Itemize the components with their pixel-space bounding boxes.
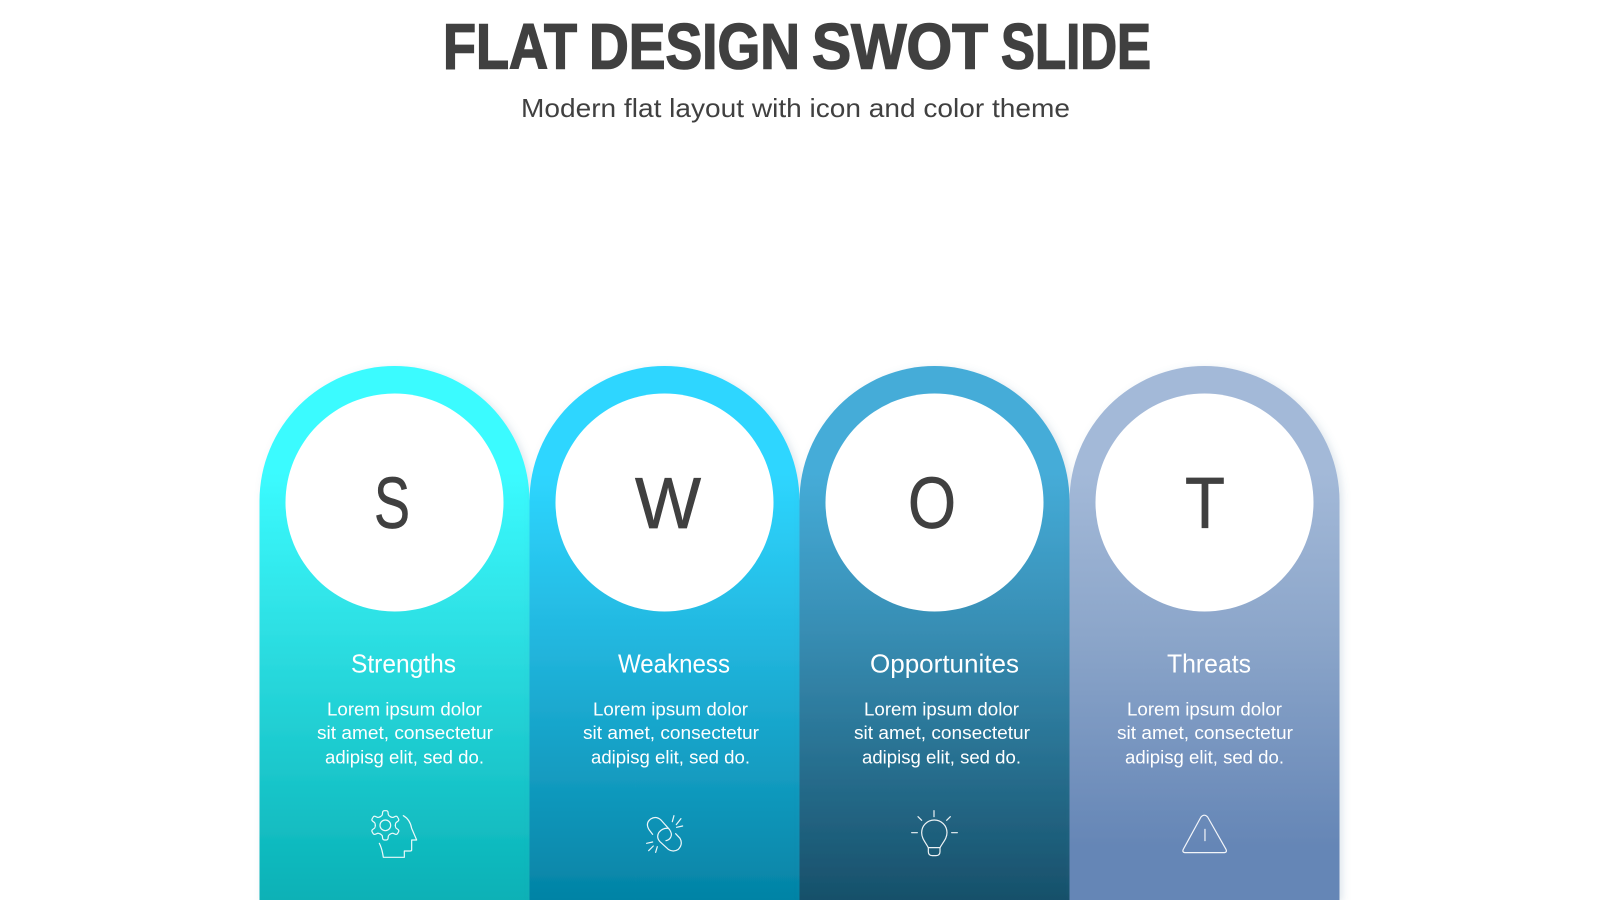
title: DESIGN xyxy=(589,10,800,82)
text: threats body: Lorem ipsum dolor xyxy=(1127,700,1282,720)
pill background: threats xyxy=(1070,366,1340,900)
title xyxy=(443,10,1151,82)
pill background: opportunities xyxy=(800,366,1070,900)
heading: Threats: Threats xyxy=(1167,648,1251,678)
text: opportunities body xyxy=(854,700,1030,768)
text: opportunities body: adipisg elit, sed do. xyxy=(862,748,1021,768)
text: strengths body: Lorem ipsum dolor xyxy=(327,700,482,720)
icon: broken chain link xyxy=(647,816,683,852)
subtitle: Modern flat layout with icon and color theme xyxy=(521,93,1070,123)
panel: strengths xyxy=(260,366,530,900)
letter S: S xyxy=(374,464,410,544)
circle: T xyxy=(1096,394,1314,612)
text: weakness body xyxy=(583,700,759,768)
icon: light bulb xyxy=(912,811,957,856)
title: SLIDE xyxy=(1001,10,1151,82)
pill background: weakness xyxy=(530,366,800,900)
circle: S xyxy=(286,394,504,612)
text: weakness body: sit amet, consectetur xyxy=(583,723,759,743)
pill background: strengths xyxy=(260,366,530,900)
text: strengths body: sit amet, consectetur xyxy=(317,723,493,743)
text: weakness body: adipisg elit, sed do. xyxy=(591,748,750,768)
letter T: T xyxy=(1185,464,1225,544)
title: FLAT xyxy=(443,10,577,82)
text: strengths body: adipisg elit, sed do. xyxy=(325,748,484,768)
text: threats body: adipisg elit, sed do. xyxy=(1125,748,1284,768)
heading: Weakness: Weakness xyxy=(618,648,730,678)
text: strengths body xyxy=(317,700,493,768)
panel: threats xyxy=(1070,366,1340,900)
letter O: O xyxy=(908,464,956,544)
letter W: W xyxy=(635,464,701,544)
text: threats body: sit amet, consectetur xyxy=(1117,723,1293,743)
panel: weakness xyxy=(530,366,800,900)
text: weakness body: Lorem ipsum dolor xyxy=(593,700,748,720)
title: SWOT xyxy=(812,10,988,82)
text: opportunities body: sit amet, consectetur xyxy=(854,723,1030,743)
heading: Opportunites: Opportunites xyxy=(870,648,1019,678)
text: threats body xyxy=(1117,700,1293,768)
circle: W xyxy=(556,394,774,612)
circle: O xyxy=(826,394,1044,612)
icon: head with gear xyxy=(370,811,417,857)
icon: warning triangle xyxy=(1183,815,1226,853)
heading: Strengths: Strengths xyxy=(351,648,456,678)
text: opportunities body: Lorem ipsum dolor xyxy=(864,700,1019,720)
panel: opportunities xyxy=(800,366,1070,900)
